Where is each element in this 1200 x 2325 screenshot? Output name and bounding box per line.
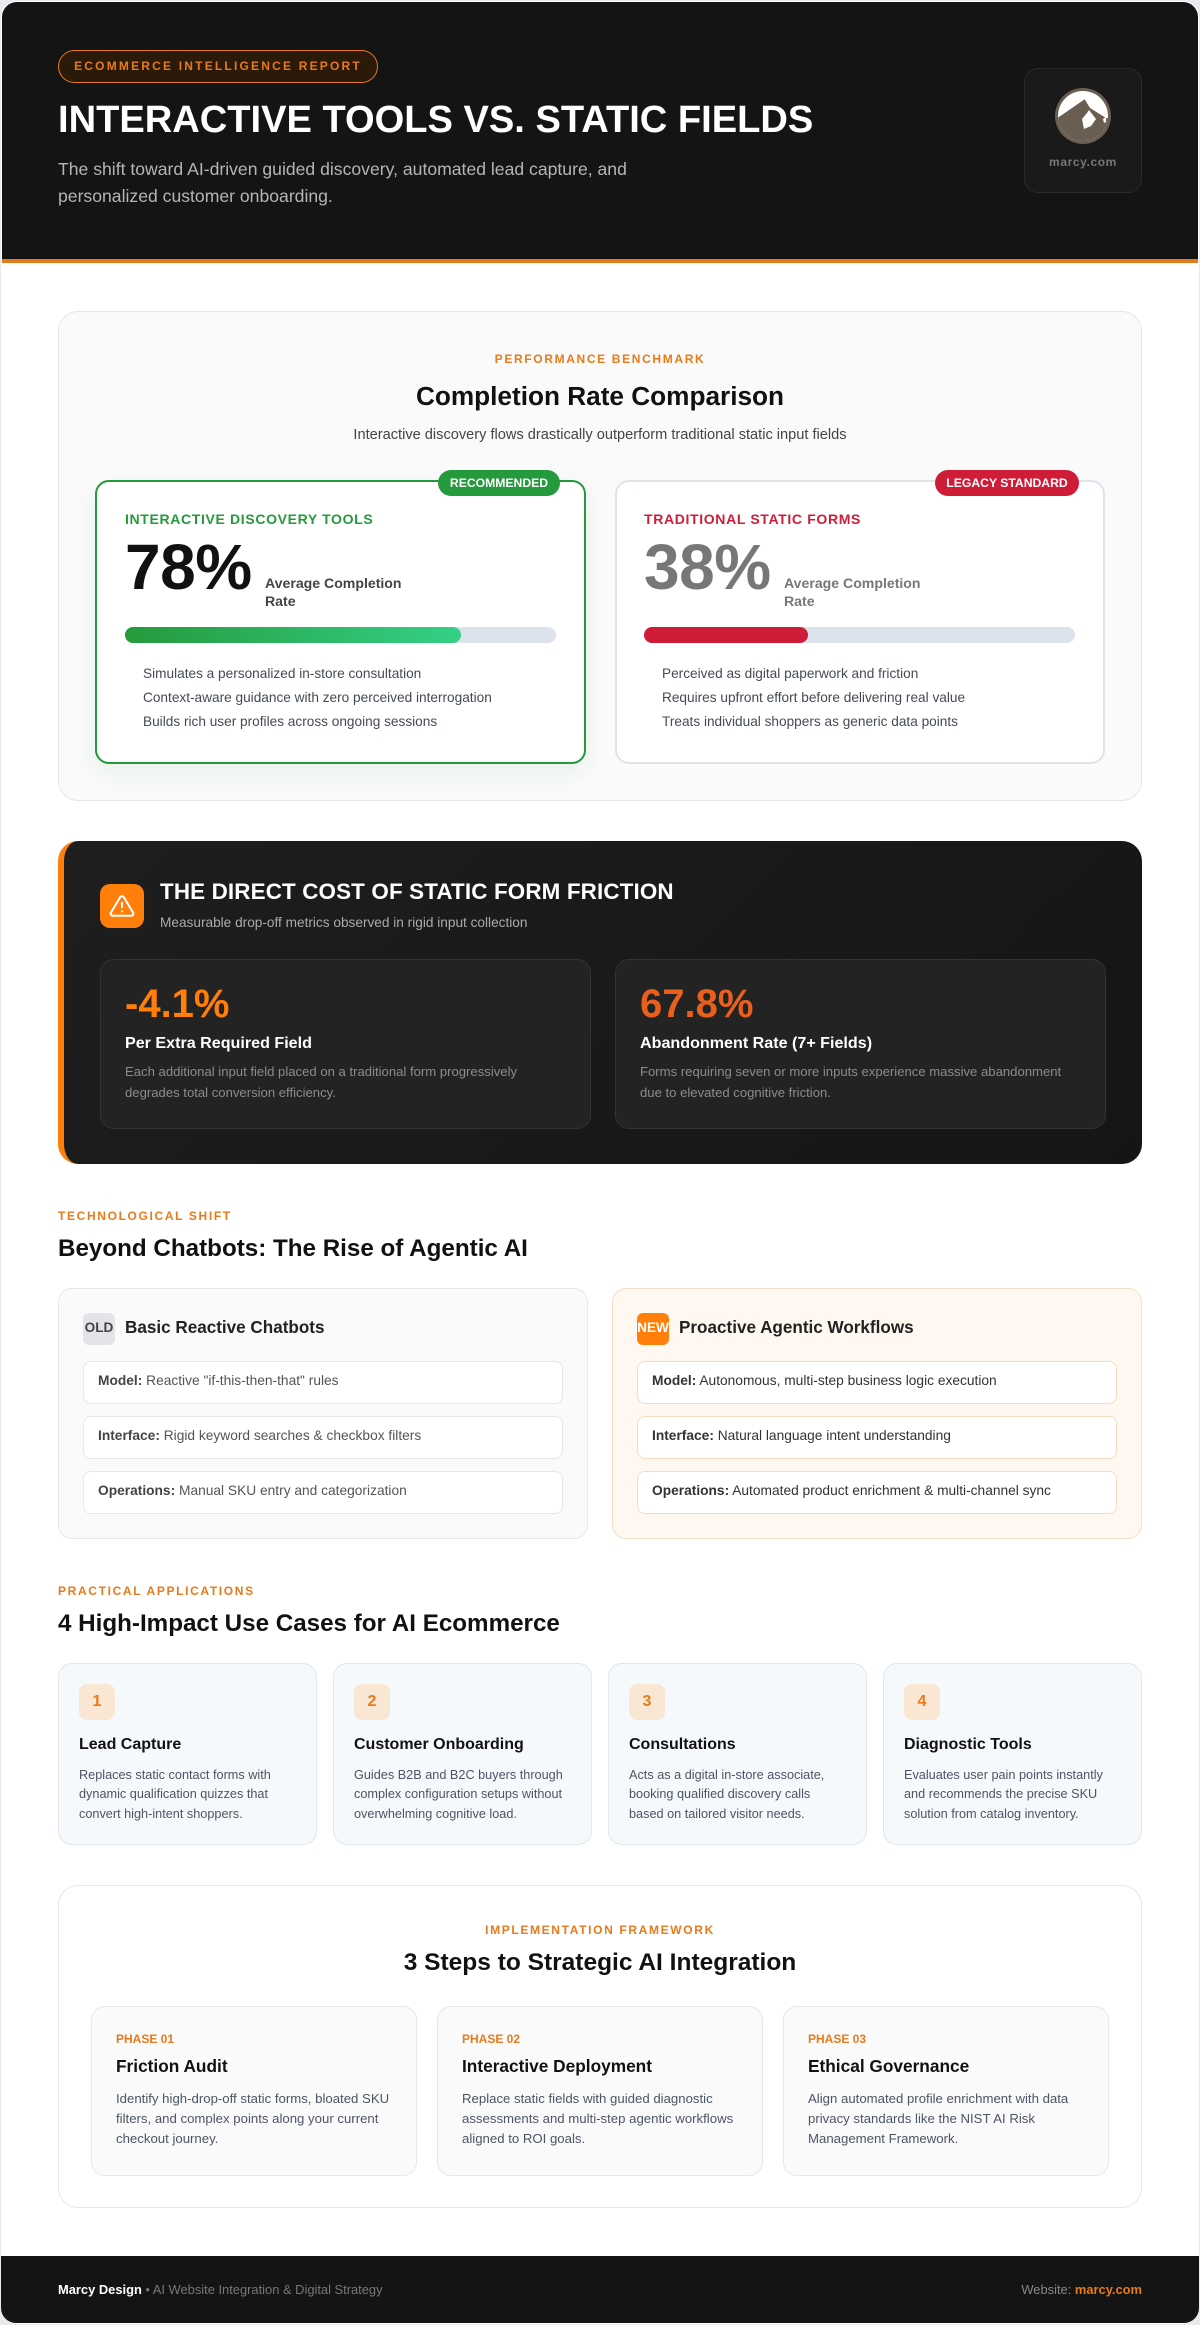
badge: legacy standard: LEGACY STANDARD [946,476,1068,490]
subtitle: The shift toward AI-driven guided discovery, automated lead capture, and [58,159,627,179]
description: Interactive discovery flows drastically outperform traditional static input fields [353,427,847,443]
description: and recommends the precise SKU [904,1787,1097,1801]
description: Forms requiring seven or more inputs experience massive abandonment [640,1064,1061,1079]
header band [2,2,1198,263]
subtitle [58,159,627,206]
footer right text: Website: marcy.com [1021,2282,1142,2297]
description [79,1768,271,1820]
phase description [808,2091,1068,2146]
description: degrades total conversion efficiency. [125,1085,336,1100]
number: 1 [93,1693,101,1710]
description [904,1768,1103,1820]
heading: use cases: 4 High-Impact Use Cases for AI Ecommerce [58,1610,560,1637]
badge: legacy standard [935,470,1079,496]
phase description: privacy standards like the NIST AI Risk [808,2111,1035,2126]
heading: beyond chatbots: Beyond Chatbots: The Rise of Agentic AI [58,1235,528,1262]
stat card: abandonment rate [615,959,1106,1129]
subtitle: personalized customer onboarding. [58,186,333,206]
description: convert high-intent shoppers. [79,1806,243,1820]
phase description: Identify high-drop-off static forms, bloated SKU [116,2091,389,2106]
phase label: PHASE 02 [462,2032,520,2046]
row: operations: Operations: Manual SKU entry and categorization [98,1483,407,1498]
number [354,1684,390,1720]
label: Per Extra Required Field [125,1034,312,1052]
phase description: checkout journey. [116,2131,218,2146]
row: model [637,1361,1117,1404]
panel: implementation framework [58,1885,1142,2208]
phase title: Friction Audit [116,2056,228,2076]
badge: new: NEW [637,1320,669,1335]
eyebrow: PERFORMANCE BENCHMARK [495,352,705,366]
stat: 78%: 78% [125,531,252,603]
drawbacks list [662,666,965,729]
phase 01 [91,2006,417,2176]
number [629,1684,665,1720]
phase description: Align automated profile enrichment with data [808,2091,1068,2106]
description: based on tailored visitor needs. [629,1806,805,1820]
progress fill [125,627,461,643]
card: interactive discovery tools [95,480,586,764]
row: operations [83,1471,563,1514]
eyebrow: IMPLEMENTATION FRAMEWORK [485,1923,715,1937]
row: operations [637,1471,1117,1514]
benefits list: Context-aware guidance with zero perceived interrogation [143,690,492,705]
title: Diagnostic Tools [904,1736,1032,1753]
phase 03 [783,2006,1109,2176]
phase title: Interactive Deployment [462,2056,652,2076]
badge: old [83,1313,115,1345]
title: Consultations [629,1736,736,1753]
row: model: Model: Reactive "if-this-then-that" rules [98,1373,339,1388]
drawbacks list: Treats individual shoppers as generic data points [662,714,958,729]
friction heading: THE DIRECT COST OF STATIC FORM FRICTION [160,879,674,904]
number [79,1684,115,1720]
row: interface: Interface: Rigid keyword searches & checkbox filters [98,1428,421,1443]
panel: completion rate comparison [58,311,1142,801]
stat caption: Rate [784,593,815,609]
row: interface: Interface: Natural language intent understanding [652,1428,951,1443]
panel: cost of friction [58,841,1142,1164]
phase description: assessments and multi-step agentic workflows [462,2111,733,2126]
number: 4 [918,1693,926,1710]
phase description [462,2091,733,2146]
use case: consultations [608,1663,867,1845]
description: overwhelming cognitive load. [354,1806,517,1820]
panel: proactive agentic workflows [612,1288,1142,1539]
drawbacks list: Requires upfront effort before delivering real value [662,690,965,705]
description [125,1064,517,1100]
description: Each additional input field placed on a traditional form progressively [125,1064,517,1079]
heading: 3 Steps to Strategic AI Integration [404,1949,796,1976]
card label: TRADITIONAL STATIC FORMS [644,511,861,527]
eyebrow: technological shift: TECHNOLOGICAL SHIFT [58,1209,232,1223]
title: Lead Capture [79,1736,181,1753]
phase 02 [437,2006,763,2176]
stat card: per extra field [100,959,591,1129]
phase description: Management Framework. [808,2131,958,2146]
stat caption [265,575,402,609]
row: model: Model: Autonomous, multi-step business logic execution [652,1373,997,1388]
number: 3 [643,1693,651,1710]
footer left text: Marcy Design • AI Website Integration & Digital Strategy [58,2282,383,2297]
card: traditional static forms [615,480,1105,764]
description [629,1768,824,1820]
progress fill [644,627,808,643]
friction subheading: Measurable drop-off metrics observed in rigid input collection [160,915,527,930]
card label: INTERACTIVE DISCOVERY TOOLS [125,511,373,527]
description: due to elevated cognitive friction. [640,1085,831,1100]
use case: customer onboarding [333,1663,592,1845]
benefits list [143,666,492,729]
badge: recommended: RECOMMENDED [450,476,548,490]
icon: mountain logo [1055,88,1111,144]
description: booking qualified discovery calls [629,1787,810,1801]
stat caption [784,575,921,609]
badge: old: OLD [85,1320,113,1335]
panel: basic reactive chatbots [58,1288,588,1539]
row: operations: Operations: Automated product enrichment & multi-channel sync [652,1483,1051,1498]
footer [1,2256,1199,2323]
value: -4.1% [125,982,230,1026]
description: solution from catalog inventory. [904,1806,1079,1820]
drawbacks list: Perceived as digital paperwork and friction [662,666,918,681]
description: complex configuration setups without [354,1787,562,1801]
description: Evaluates user pain points instantly [904,1768,1103,1782]
description: Replaces static contact forms with [79,1768,271,1782]
phase label: PHASE 01 [116,2032,174,2046]
badge: recommended [438,470,560,496]
description [640,1064,1062,1100]
row: model [83,1361,563,1404]
row: interface [83,1416,563,1459]
panel heading: Basic Reactive Chatbots [125,1318,324,1336]
description: Guides B2B and B2C buyers through [354,1768,563,1782]
phase title: Ethical Governance [808,2056,969,2076]
phase description [116,2091,389,2146]
title: INTERACTIVE TOOLS VS. STATIC FIELDS [58,99,813,141]
stat caption: Rate [265,593,296,609]
header badge [58,50,378,83]
stat: 38%: 38% [644,531,771,603]
logo caption: marcy.com [1049,155,1117,169]
value: 67.8% [640,982,753,1026]
phase description: filters, and complex points along your current [116,2111,378,2126]
benefits list: Simulates a personalized in-store consultation [143,666,421,681]
phase description: Replace static fields with guided diagnostic [462,2091,713,2106]
number: 2 [368,1693,376,1710]
progress bar [644,627,1075,643]
progress bar [125,627,556,643]
panel heading: Proactive Agentic Workflows [679,1318,914,1336]
row: interface [637,1416,1117,1459]
use case: lead capture [58,1663,317,1845]
badge: new [637,1313,669,1345]
stat caption: Average Completion [784,575,921,591]
phase label: PHASE 03 [808,2032,866,2046]
number [904,1684,940,1720]
description: dynamic qualification quizzes that [79,1787,268,1801]
benefits list: Builds rich user profiles across ongoing sessions [143,714,437,729]
eyebrow: practical applications: PRACTICAL APPLICATIONS [58,1584,255,1598]
stat caption: Average Completion [265,575,402,591]
label: Abandonment Rate (7+ Fields) [640,1034,872,1052]
title: Customer Onboarding [354,1736,524,1753]
heading: Completion Rate Comparison [416,381,784,411]
logo card [1024,68,1142,193]
phase description: aligned to ROI goals. [462,2131,585,2146]
icon: warning [100,884,144,928]
header badge: ECOMMERCE INTELLIGENCE REPORT [74,59,362,73]
use case: diagnostic tools [883,1663,1142,1845]
description [354,1768,563,1820]
description: Acts as a digital in-store associate, [629,1768,824,1782]
